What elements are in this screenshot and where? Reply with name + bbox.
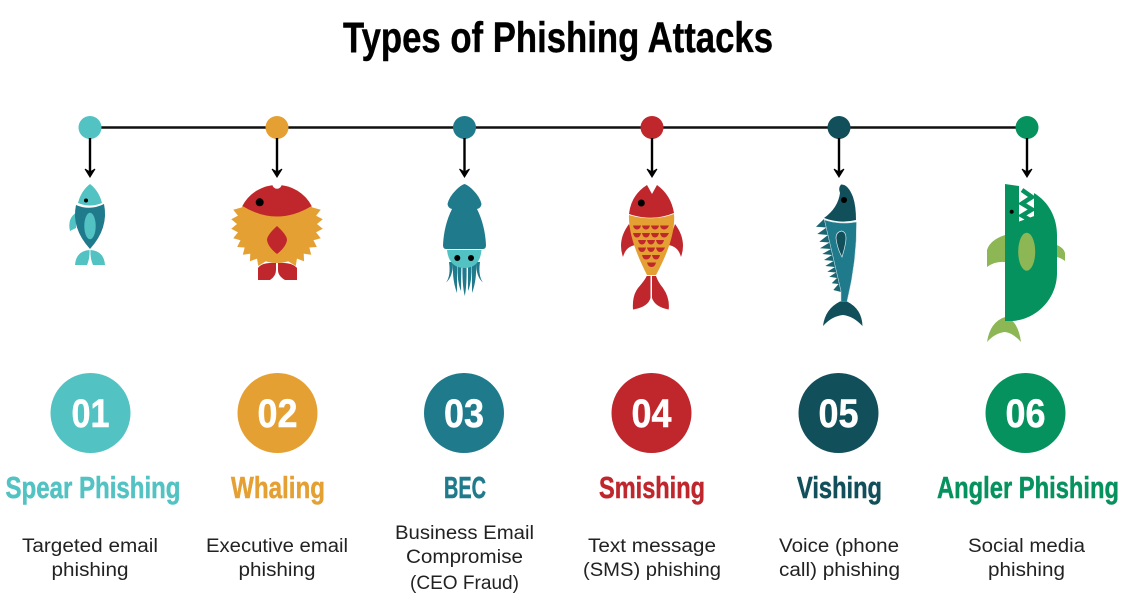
title: Types of Phishing Attacks [343, 14, 773, 62]
icon: spear fish [69, 184, 105, 265]
timeline dot 05 [828, 116, 850, 139]
description 04 [583, 536, 721, 581]
number badge 06 [986, 373, 1066, 453]
description 06: phishing [988, 560, 1065, 581]
number badge 06: 06 [1006, 392, 1046, 436]
description 03: Compromise [406, 547, 523, 568]
arrow 06 [1022, 138, 1032, 177]
panel: 06 Angler Phishing [937, 116, 1119, 581]
description 06 [968, 536, 1085, 581]
icon: squid [443, 184, 486, 296]
icon: goldfish [621, 185, 683, 310]
description 05 [779, 536, 900, 581]
heading: Smishing: Smishing [599, 470, 705, 505]
description 04: Text message [588, 536, 716, 557]
number badge 01 [50, 373, 130, 453]
number badge 05 [798, 373, 878, 453]
panel: 04 Smishing [583, 116, 721, 581]
description 06: Social media [968, 536, 1085, 557]
description 01: Targeted email [22, 536, 158, 557]
arrow 01 [85, 138, 95, 177]
description 03: (CEO Fraud) [410, 573, 519, 594]
description 01: phishing [52, 560, 128, 581]
number badge 03 [424, 373, 504, 453]
number badge 02 [238, 373, 318, 453]
heading: BEC: BEC [444, 470, 486, 505]
number badge 05: 05 [818, 392, 858, 436]
timeline dot 03 [453, 116, 476, 139]
icon: angler fish [987, 184, 1065, 342]
arrow 03 [460, 138, 470, 177]
timeline line [90, 126, 1027, 129]
number badge 04 [612, 373, 692, 453]
arrow 05 [834, 138, 844, 177]
description 05: Voice (phone [779, 536, 899, 557]
timeline dot 04 [640, 116, 664, 139]
description 03 [395, 523, 534, 594]
number badge 03: 03 [444, 392, 484, 436]
timeline dot 01 [78, 116, 102, 139]
number badge 02: 02 [258, 392, 298, 436]
panel: 01 Spear Phishing [6, 116, 180, 581]
arrow 04 [647, 138, 657, 177]
description 05: call) phishing [779, 560, 900, 581]
description 04: (SMS) phishing [583, 560, 721, 581]
description 02 [206, 536, 348, 581]
number badge 04: 04 [632, 392, 672, 436]
heading: Vishing: Vishing [797, 470, 882, 505]
icon: puffer fish [231, 179, 323, 280]
timeline dot 02 [266, 116, 288, 139]
panel: 03 BEC [395, 116, 534, 594]
number badge 01: 01 [72, 392, 110, 436]
panel: 02 Whaling [206, 116, 348, 581]
description 02: phishing [238, 560, 316, 581]
description 02: Executive email [206, 536, 348, 557]
timeline dot 06 [1016, 116, 1038, 139]
arrow 02 [272, 138, 282, 177]
panel: 05 Vishing [779, 116, 900, 581]
description 03: Business Email [395, 523, 534, 544]
heading: Whaling: Whaling [231, 470, 325, 505]
description 01 [22, 536, 158, 581]
heading: Spear Phishing: Spear Phishing [6, 470, 180, 505]
icon: swordfish [816, 184, 862, 326]
